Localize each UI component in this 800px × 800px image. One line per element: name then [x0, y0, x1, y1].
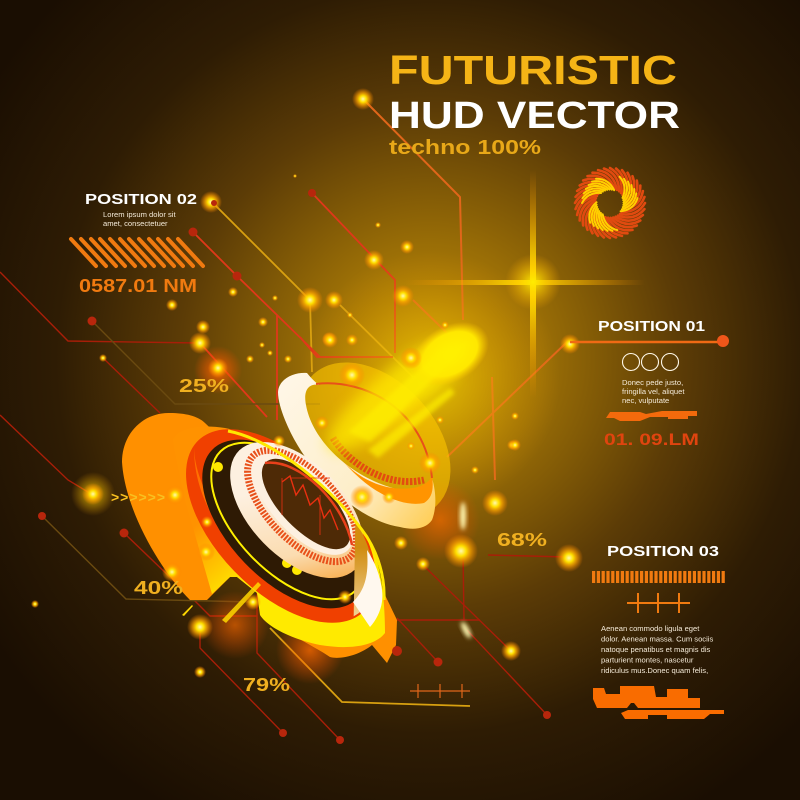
red waveform [282, 476, 338, 530]
red ring [152, 395, 410, 657]
upper rim overlay [354, 524, 372, 616]
upper translucent ring [270, 333, 480, 547]
scan grid [282, 478, 330, 535]
title: FUTURISTIC [389, 47, 677, 93]
heading: POSITION 02 [85, 191, 197, 208]
star flare [405, 170, 645, 398]
ring knobs [213, 462, 366, 584]
percent labels: 25% [179, 376, 229, 396]
heading: POSITION 01 [598, 318, 705, 335]
text block: parturient montes, nascetur [601, 656, 694, 664]
text block: fringilla vel, aliquet [622, 387, 685, 396]
title [389, 47, 680, 159]
title: HUD VECTOR [389, 95, 680, 137]
toothed red ring [229, 432, 375, 580]
panel: position 01 [570, 318, 729, 449]
title: techno 100% [389, 137, 541, 159]
connector node [717, 335, 729, 347]
text block: Aenean commodo ligula eget [601, 624, 700, 633]
dark hub [248, 445, 364, 563]
thin yellow ring [184, 416, 392, 626]
orange ring band [194, 448, 320, 596]
text block: dolor. Aenean massa. Cum sociis [601, 634, 713, 644]
tick bar [592, 571, 725, 583]
panel: position 02 [71, 191, 203, 296]
yellow blades [582, 174, 640, 233]
white inner band [239, 439, 369, 571]
dashed red arc [333, 438, 424, 482]
slanted bars [71, 239, 203, 266]
panel: position 03 [592, 543, 725, 719]
text block: natoque penatibus et magnis dis [601, 645, 711, 654]
red nodes [38, 189, 551, 744]
small plus signs [410, 684, 470, 698]
hub edge [265, 463, 352, 545]
orange back plate [122, 413, 397, 663]
yellow rim [228, 431, 384, 600]
three circles [622, 354, 678, 370]
text block: amet, consectetuer [103, 219, 168, 228]
ring interior tint [270, 333, 480, 547]
readout: 0587.01 NM [79, 276, 197, 296]
red blades [573, 166, 647, 240]
plus signs [627, 593, 690, 613]
center light haze [71, 250, 560, 684]
text block: Lorem ipsum dolor sit [103, 210, 176, 219]
white side segment [353, 550, 382, 627]
orange strip [621, 710, 724, 719]
main HUD disc [122, 413, 397, 663]
glowing particles [31, 88, 583, 678]
circuit lines [0, 99, 568, 740]
icon: spiral emblem [573, 166, 647, 240]
white crescent [278, 373, 435, 529]
light beams [182, 309, 500, 639]
orange strip [606, 411, 697, 421]
text block: nec, vulputate [622, 396, 669, 405]
percent labels [134, 376, 547, 695]
orange block graphic [593, 686, 700, 708]
connector line [570, 341, 723, 343]
dark ring [172, 410, 398, 638]
percent labels: 40% [134, 578, 183, 598]
percent labels: 68% [497, 530, 547, 550]
readout: 01. 09.LM [604, 430, 699, 449]
orange inner band [338, 455, 433, 504]
white ring [206, 418, 388, 602]
yellow plate [173, 426, 385, 647]
text block: ridiculus mus.Donec quam felis, [601, 666, 708, 675]
text block: Donec pede justo, [622, 378, 683, 387]
chevrons: >>>>>> [111, 489, 165, 505]
percent labels: 79% [243, 675, 290, 695]
thin upper rim [316, 383, 432, 478]
heading: POSITION 03 [607, 543, 719, 560]
